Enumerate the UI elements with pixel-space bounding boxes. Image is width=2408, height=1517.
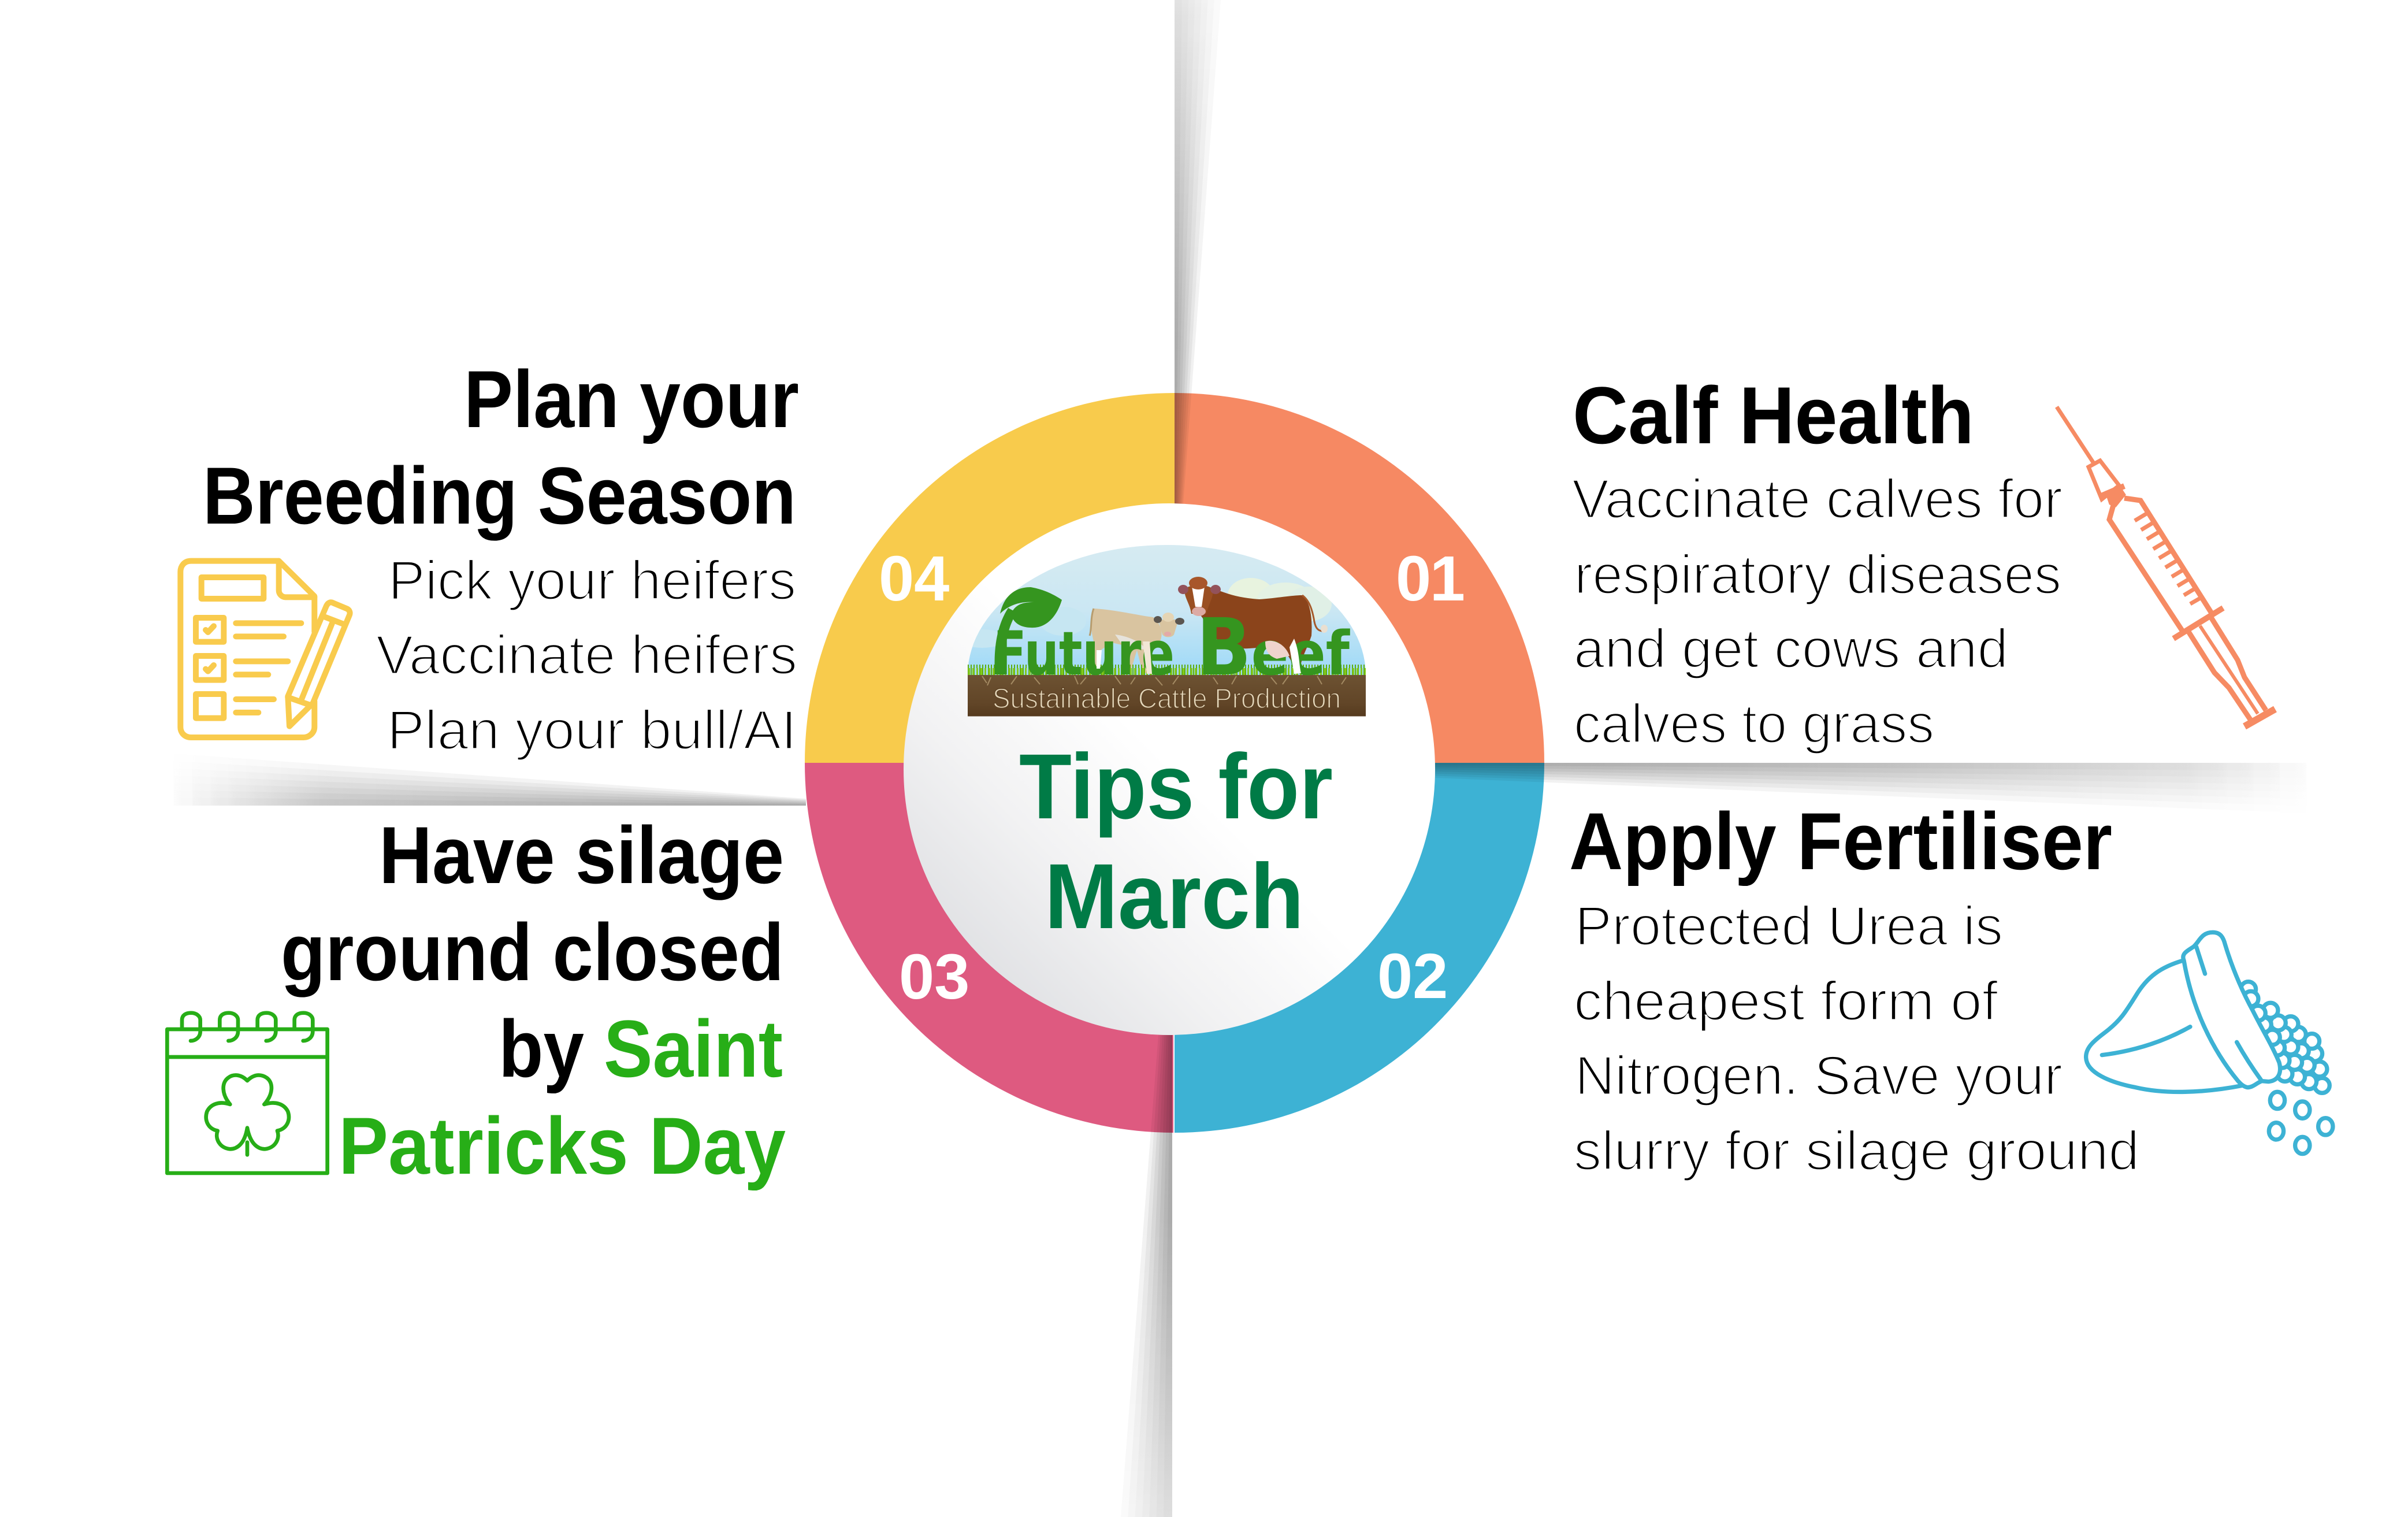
panel 01: calf health <box>1572 370 2275 755</box>
logo tagline: Sustainable Cattle Production <box>993 684 1341 714</box>
logo cow legs overlapping letters <box>1097 639 1301 674</box>
logo soil <box>968 675 1366 717</box>
centre title: Tips for <box>1019 735 1333 838</box>
number 03: 03 <box>899 941 969 1012</box>
ring: quadrant 02 blue <box>1175 763 1544 1133</box>
logo wordmark Future Beef <box>993 587 1351 693</box>
centre title <box>1019 735 1333 948</box>
logo sky dome <box>959 545 1366 675</box>
number 01: 01 <box>1396 543 1465 614</box>
text block 04: Plan your bull/AI <box>387 699 797 761</box>
ring: quadrant 03 pink <box>805 763 1173 1133</box>
heading 03: Have silage <box>379 810 784 900</box>
text block 02: Nitrogen. Save your <box>1575 1045 2063 1107</box>
panel 02: apply fertiliser <box>1569 796 2333 1182</box>
heading 03: Patricks Day <box>339 1100 786 1191</box>
heading 04 <box>203 354 799 541</box>
logo calf <box>1090 609 1184 673</box>
text block 02: cheapest form of <box>1574 970 1998 1032</box>
heading 03: ground closed <box>281 907 784 997</box>
logo wordmark Future Beef: Beef <box>1196 602 1351 693</box>
icon: checklist and pencil <box>180 561 350 737</box>
heading 04: Plan your <box>464 354 799 444</box>
heading 03: Saint <box>604 1003 783 1094</box>
icon: syringe <box>2057 407 2275 726</box>
logo leaf sprout <box>995 587 1062 674</box>
heading 04: Breeding Season <box>203 450 796 541</box>
heading 01: Calf Health <box>1573 370 1974 461</box>
text block 04: Vaccinate heifers <box>376 624 797 686</box>
panel 04: breeding season <box>180 354 799 761</box>
paper fold shadow: top <box>1175 0 1221 504</box>
icon: fertiliser bag <box>2086 932 2333 1154</box>
text block 01: calves to grass <box>1574 693 1934 755</box>
text block 02 <box>1574 895 2139 1182</box>
heading 02: Apply Fertiliser <box>1569 796 2112 887</box>
logo grass <box>968 670 1366 672</box>
ring: quadrant 04 yellow <box>805 393 1175 763</box>
paper fold shadow: right <box>1435 763 2320 814</box>
number 02: 02 <box>1377 941 1448 1012</box>
panel 03: silage ground <box>167 810 786 1191</box>
text block 01: and get cows and <box>1574 618 2008 680</box>
logo roots <box>982 676 1346 685</box>
logo: Future Beef <box>959 545 1366 717</box>
heading 03 <box>281 810 786 1191</box>
paper fold shadow: left <box>165 753 806 806</box>
number 04: 04 <box>879 543 949 614</box>
text block 04: Pick your heifers <box>388 550 796 611</box>
ring: quadrant 01 orange <box>1175 393 1544 763</box>
heading 03: by <box>499 1003 584 1094</box>
text block 02: Protected Urea is <box>1575 895 2003 957</box>
text block 01: Vaccinate calves for <box>1572 468 2063 530</box>
logo cow <box>1178 577 1328 673</box>
centre disc <box>904 503 1435 1035</box>
text block 02: slurry for silage ground <box>1574 1120 2139 1182</box>
text block 01 <box>1572 468 2063 755</box>
logo wordmark Future Beef: Future <box>993 618 1175 689</box>
paper fold shadow: bottom <box>1121 1035 1172 1517</box>
icon: calendar with shamrock <box>167 1013 328 1173</box>
centre title: March <box>1045 844 1304 948</box>
text block 01: respiratory diseases <box>1574 544 2061 606</box>
text block 04 <box>376 550 797 761</box>
